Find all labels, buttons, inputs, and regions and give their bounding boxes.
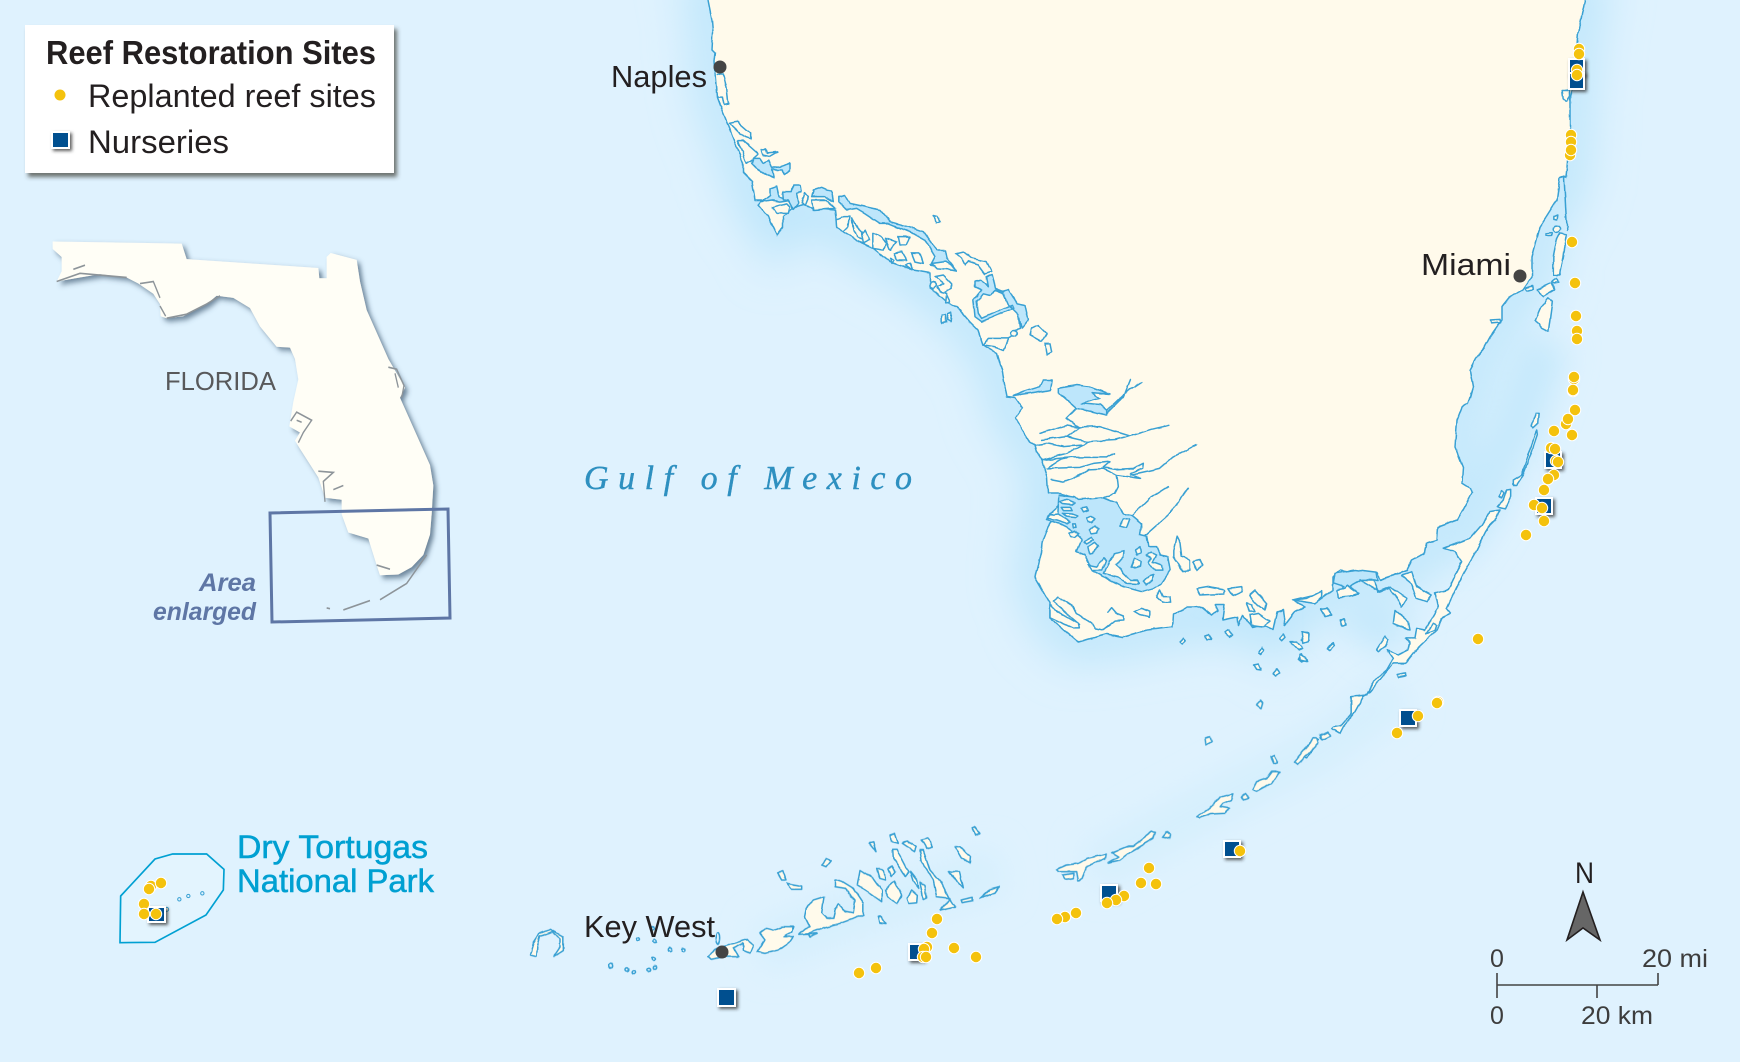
legend item: nurseries: Nurseries	[88, 124, 229, 160]
Lower Keys and Key West	[530, 827, 999, 974]
label: Gulf of Mexico: Gulf of Mexico	[584, 460, 912, 497]
north arrow: N	[1575, 857, 1594, 890]
Gulf coast islands and waterways	[717, 74, 1052, 354]
Upper Keys	[1300, 413, 1539, 758]
north arrow	[1567, 857, 1600, 940]
city labels: Key West	[584, 909, 715, 944]
label: Dry Tortugas National Park: National Park	[237, 863, 435, 899]
label: Dry Tortugas National Park	[237, 829, 435, 899]
city labels: Miami	[1421, 247, 1511, 282]
panel: legend	[25, 25, 394, 173]
scale bar: 20 km	[1581, 1002, 1653, 1030]
nurseries	[148, 59, 1584, 1006]
inset label: FLORIDA: FLORIDA	[165, 366, 277, 396]
city labels	[584, 59, 1511, 944]
scale bar	[1490, 945, 1708, 1030]
city labels: Naples	[611, 59, 707, 94]
inset: area enlarged box	[270, 509, 450, 622]
inset label: Area enlarged: enlarged	[153, 598, 257, 626]
Biscayne Bay barrier islands	[1491, 90, 1570, 332]
scale bar: 0	[1490, 945, 1504, 973]
coastal shallow-water glow	[706, 0, 1586, 950]
legend item: replanted reef sites: Replanted reef sites	[88, 78, 376, 114]
Everglades channels and Whitewater Bay	[1013, 380, 1345, 676]
inset label: Area enlarged: Area	[198, 569, 256, 597]
Dry Tortugas National Park boundary and islets	[120, 854, 224, 943]
legend title: Reef Restoration Sites	[46, 34, 376, 71]
Middle Keys	[1057, 701, 1331, 881]
inset label: Area enlarged	[153, 569, 257, 626]
label: Dry Tortugas National Park: Dry Tortugas	[237, 829, 428, 865]
replanted reef sites	[138, 43, 1585, 979]
inset: Florida locator map	[53, 242, 450, 626]
city markers	[714, 60, 1526, 958]
mainland south Florida	[706, 0, 1586, 642]
coastline, islands and waterways	[530, 0, 1586, 974]
scale bar: 20 mi	[1642, 945, 1708, 973]
scale bar: 0	[1490, 1002, 1504, 1030]
